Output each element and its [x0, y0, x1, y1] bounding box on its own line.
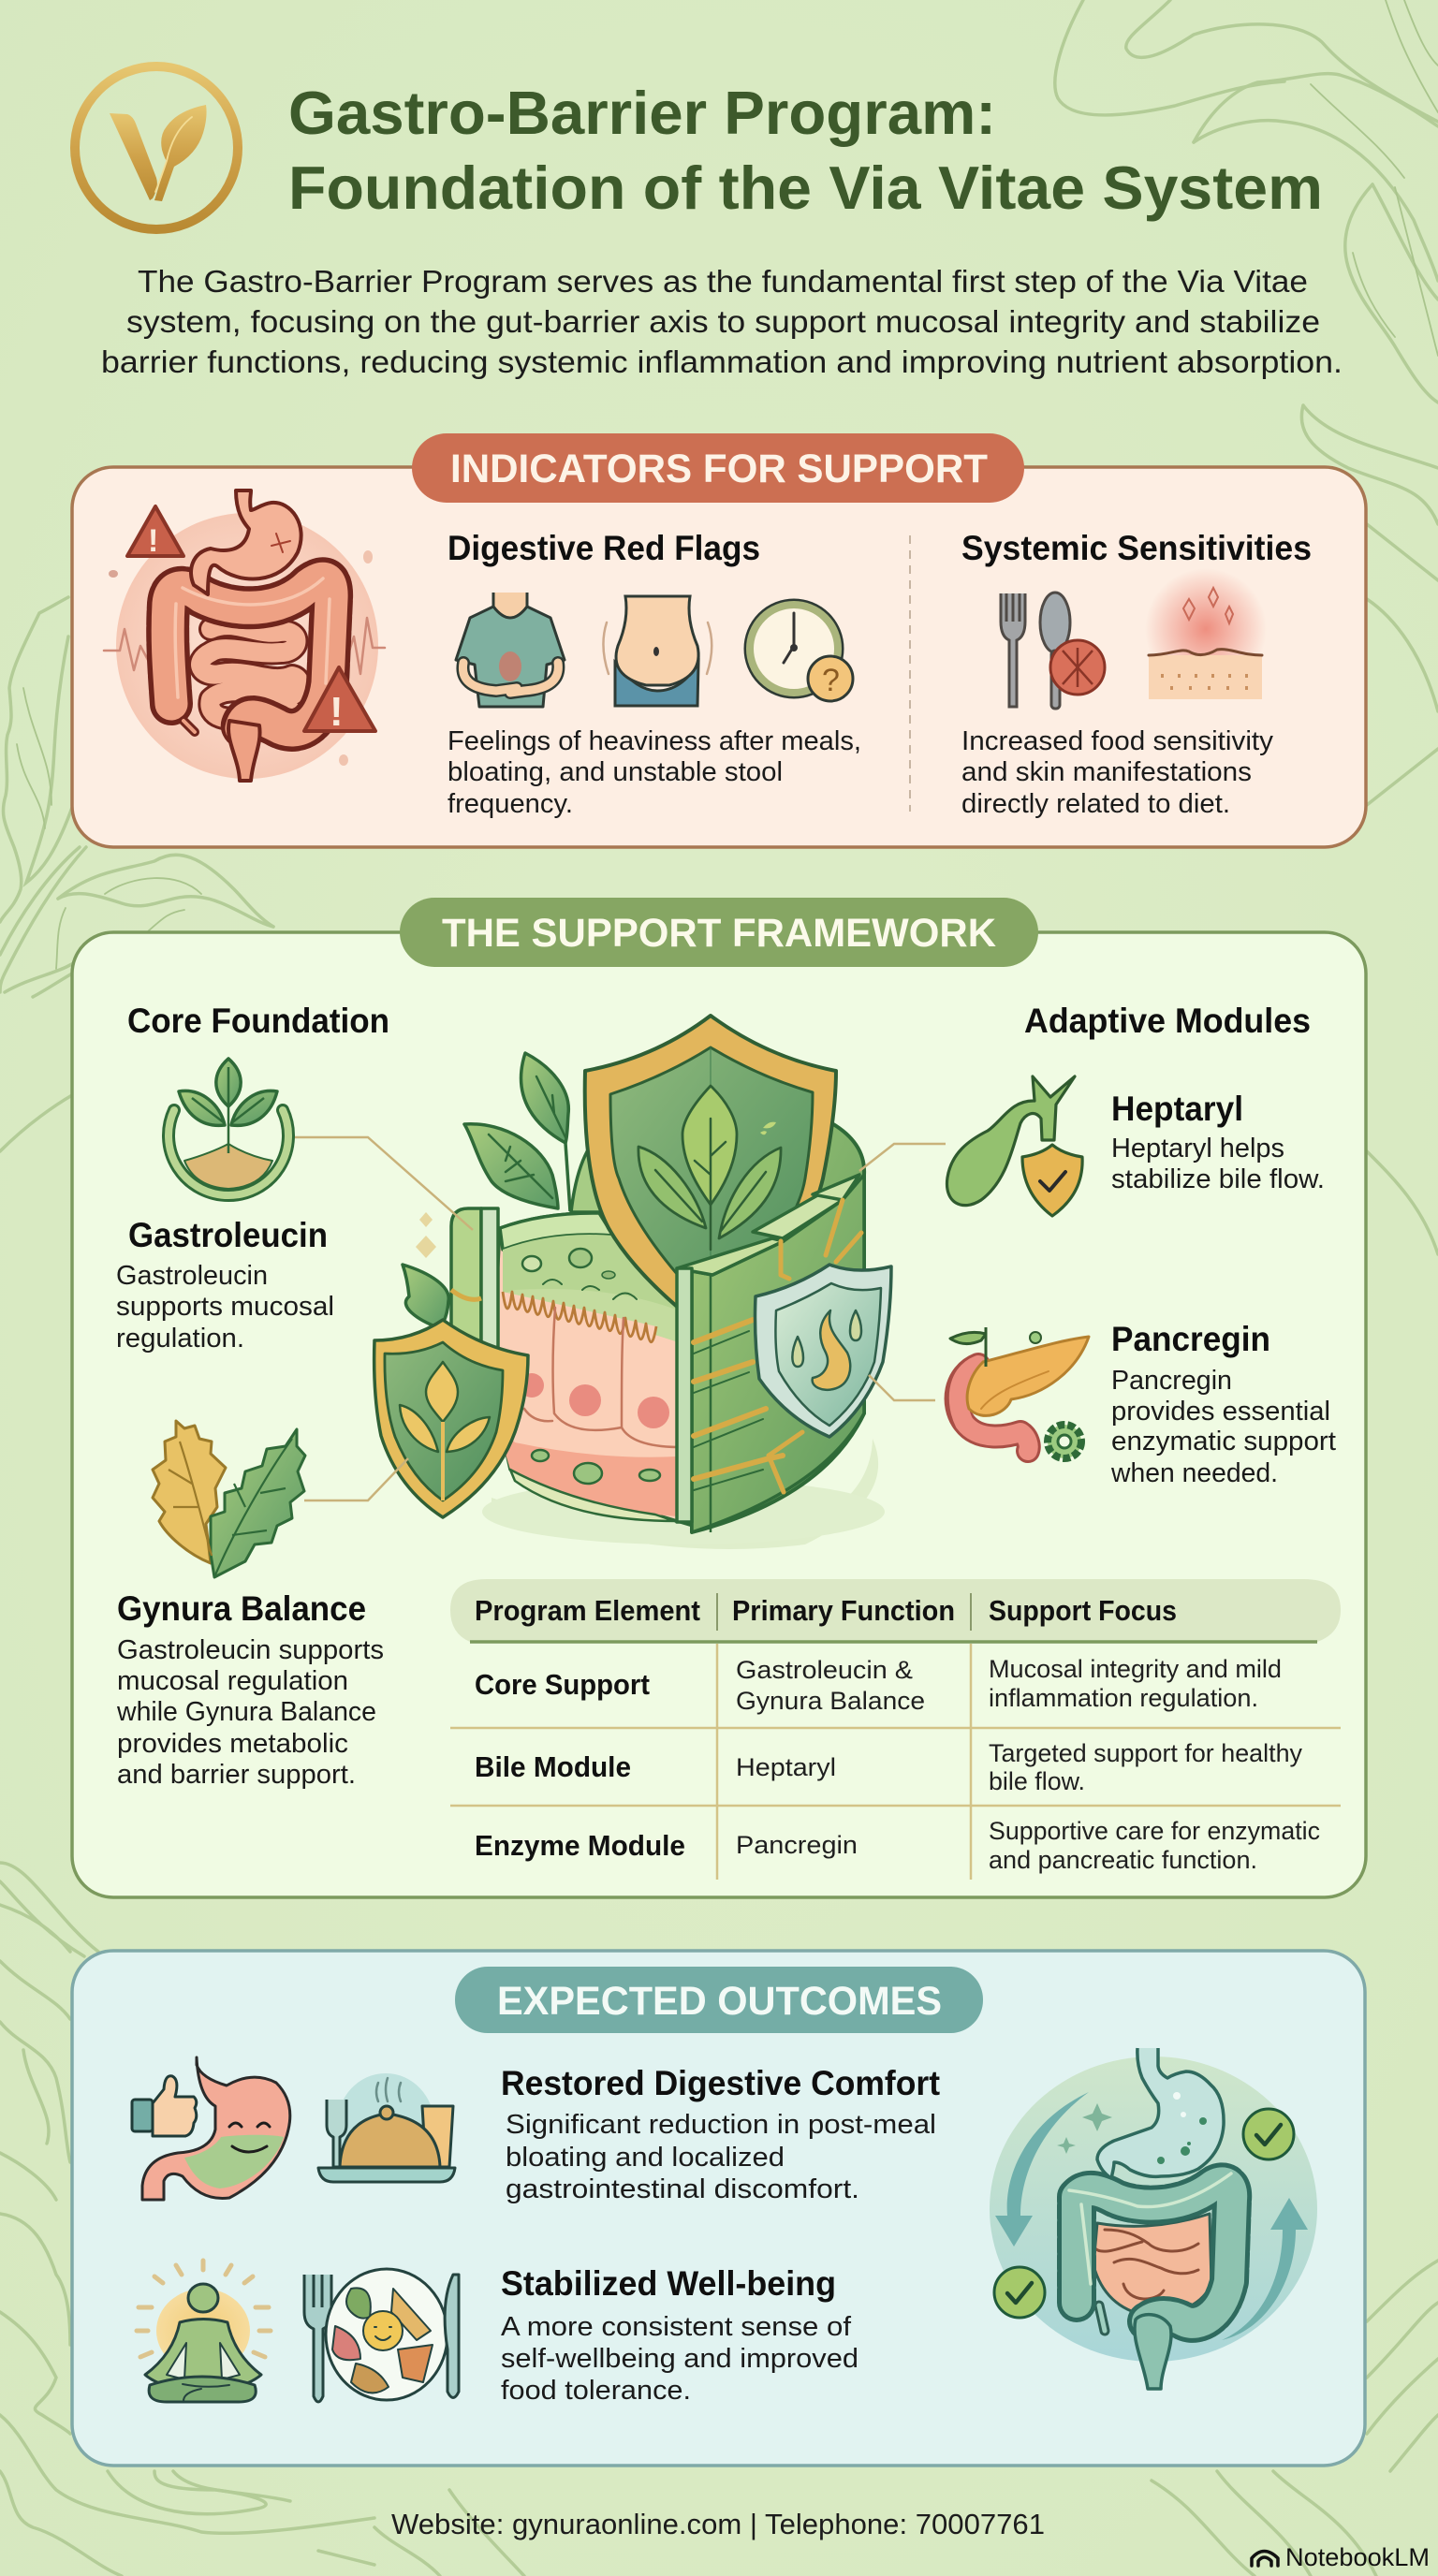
- heading: core foundation: Core Foundation: [127, 1002, 389, 1040]
- text: heptaryl: stabilize bile flow.: [1111, 1164, 1325, 1194]
- text: gastroleucin: [116, 1261, 334, 1354]
- text: systemic sensitivities: directly related to diet.: [961, 789, 1230, 819]
- heading pill: expected outcomes: [455, 1967, 983, 2033]
- icon: inflamed digestive tract: [104, 490, 385, 781]
- text: heptaryl: Heptaryl helps: [1111, 1134, 1284, 1164]
- text: systemic sensitivities: and skin manifestations: [961, 757, 1252, 787]
- heading: restored digestive comfort: Restored Digestive Comfort: [501, 2064, 940, 2102]
- left pillar: [451, 1208, 498, 1385]
- row: core support: Mucosal integrity and mild: [989, 1655, 1282, 1683]
- row: core support: Gastroleucin &: [736, 1656, 913, 1684]
- text: gynura balance: mucosal regulation: [117, 1666, 348, 1696]
- text: gynura balance: Gastroleucin supports: [117, 1635, 384, 1665]
- panel: the support framework: [72, 898, 1366, 1897]
- text: pancregin: Pancregin: [1111, 1366, 1232, 1396]
- heading: gynura balance: Gynura Balance: [117, 1589, 366, 1628]
- row: enzyme module: and pancreatic function.: [989, 1846, 1257, 1874]
- icon: person holding stomach: [456, 593, 565, 707]
- text: stabilized well-being: A more consistent sense of: [501, 2312, 852, 2342]
- intro text: [101, 264, 1343, 379]
- icon: bloated belly: [603, 596, 712, 706]
- icon: thumbs up: [132, 2076, 197, 2136]
- heading: pancregin: Pancregin: [1111, 1320, 1270, 1358]
- text: stabilized well-being: food tolerance.: [501, 2376, 691, 2406]
- icon: pancreas with gear: [950, 1327, 1089, 1458]
- panel: indicators for support: [72, 433, 1366, 847]
- text: pancregin: [1110, 1366, 1336, 1488]
- heading pill: indicators: [412, 433, 1024, 503]
- tissue cross section: [492, 1213, 693, 1526]
- row: enzyme module: Supportive care for enzymatic: [989, 1817, 1320, 1845]
- sparkles: [416, 1212, 436, 1258]
- watermark: notebooklm: NotebookLM: [1285, 2543, 1430, 2571]
- back wall: [692, 1121, 864, 1532]
- icon: irritated skin: [1145, 568, 1267, 699]
- icon: fork and spoon with cross: [1001, 593, 1105, 709]
- back leaves: [464, 1053, 604, 1212]
- icon: gallbladder with shield: [946, 1076, 1082, 1216]
- text: digestive red flags: [448, 726, 861, 819]
- small leaf: [403, 1265, 448, 1328]
- text: systemic sensitivities: [961, 726, 1273, 819]
- icon: sprout in soil: [169, 1059, 288, 1195]
- table header: [450, 1579, 1341, 1642]
- row: enzyme module: [475, 1817, 1320, 1874]
- icon: covered dish: [318, 2073, 455, 2182]
- row: core support: Gynura Balance: [736, 1687, 925, 1715]
- text: digestive red flags: bloating, and unstable stool: [448, 757, 783, 787]
- text: gastroleucin: Gastroleucin: [116, 1261, 268, 1291]
- table: program elements: [450, 1579, 1341, 1880]
- intro text: The Gastro-Barrier Program serves as the fundamental first step of the Via Vitae: [138, 264, 1308, 299]
- logo: gold V leaf: [75, 66, 238, 229]
- row: bile module: Heptaryl: [736, 1753, 836, 1781]
- gold left shield: [374, 1320, 528, 1517]
- icon: healthy gut illustration: [990, 2048, 1317, 2389]
- illustration: gut barrier with shields: [374, 1016, 891, 1549]
- text: pancregin: when needed.: [1110, 1458, 1278, 1488]
- icon: clock with question mark: ?: [822, 663, 840, 698]
- intro text: system, focusing on the gut-barrier axis to support mucosal integrity and stabilize: [126, 304, 1320, 339]
- divider: [909, 535, 911, 812]
- row: core support: Core Support: [475, 1668, 650, 1701]
- text: pancregin: enzymatic support: [1111, 1427, 1336, 1456]
- text: digestive red flags: frequency.: [448, 789, 573, 819]
- table header: Program Element: [475, 1594, 700, 1627]
- text: stabilized well-being: [501, 2312, 858, 2406]
- row: core support: [475, 1655, 1282, 1715]
- row: bile module: Bile Module: [475, 1750, 631, 1783]
- text: gynura balance: provides metabolic: [117, 1729, 348, 1759]
- footer contact line: Website: gynuraonline.com | Telephone: 70007761: [391, 2508, 1045, 2540]
- icon: clock with question mark: [745, 600, 853, 701]
- text: gastroleucin: supports mucosal: [116, 1292, 334, 1322]
- icon: meditating person: [137, 2261, 271, 2402]
- heading pill: support framework: [400, 898, 1038, 967]
- row: bile module: [475, 1739, 1302, 1795]
- heading: adaptive modules: Adaptive Modules: [1024, 1002, 1311, 1040]
- text: systemic sensitivities: Increased food sensitivity: [961, 726, 1273, 756]
- text: pancregin: provides essential: [1111, 1397, 1330, 1427]
- row: core support: inflammation regulation.: [989, 1684, 1258, 1712]
- heading pill: indicators: INDICATORS FOR SUPPORT: [450, 446, 988, 491]
- table header: Primary Function: [732, 1594, 955, 1627]
- icon: plate with food: [304, 2269, 459, 2402]
- row: bile module: bile flow.: [989, 1767, 1085, 1795]
- teal right shield: [755, 1265, 891, 1437]
- row: enzyme module: Pancregin: [736, 1831, 858, 1859]
- row: bile module: Targeted support for healthy: [989, 1739, 1302, 1767]
- text: restored comfort: Significant reduction in post-meal: [506, 2110, 936, 2140]
- text: restored comfort: gastrointestinal discomfort.: [506, 2174, 859, 2204]
- text: gynura balance: [116, 1635, 384, 1790]
- text: gynura balance: while Gynura Balance: [116, 1697, 376, 1727]
- heading: stabilized well-being: Stabilized Well-being: [501, 2264, 836, 2303]
- heading: gastroleucin: Gastroleucin: [128, 1216, 328, 1254]
- text: gynura balance: and barrier support.: [117, 1760, 356, 1790]
- text: gastroleucin: regulation.: [116, 1324, 244, 1354]
- table header: Support Focus: [989, 1594, 1177, 1627]
- heading pill: expected outcomes: EXPECTED OUTCOMES: [497, 1979, 942, 2024]
- text: restored comfort: bloating and localized: [506, 2143, 785, 2173]
- title: Gastro-Barrier Program:: [288, 79, 996, 147]
- heading: systemic sensitivities: Systemic Sensitivities: [961, 529, 1312, 567]
- icon: gynura leaves: [153, 1421, 305, 1577]
- intro text: barrier functions, reducing systemic inflammation and improving nutrient absorption.: [101, 344, 1343, 379]
- icon: inflamed digestive tract: !: [330, 689, 344, 735]
- text: restored comfort: [506, 2110, 936, 2204]
- text: digestive red flags: Feelings of heaviness after meals,: [448, 726, 861, 756]
- large shield: [585, 1016, 836, 1334]
- connector lines: [294, 1137, 946, 1500]
- title: [288, 79, 1323, 222]
- row: enzyme module: Enzyme Module: [475, 1829, 685, 1862]
- heading: digestive red flags: Digestive Red Flags: [448, 529, 760, 567]
- icon: inflamed digestive tract: !: [148, 523, 158, 559]
- panel: expected outcomes: [72, 1951, 1365, 2466]
- text: stabilized well-being: self-wellbeing and improved: [501, 2344, 858, 2374]
- title: Foundation of the Via Vitae System: [288, 154, 1323, 222]
- heading pill: support framework: THE SUPPORT FRAMEWORK: [442, 911, 996, 956]
- text: heptaryl: [1111, 1134, 1325, 1194]
- brick barrier wall: [677, 1175, 864, 1532]
- heading: heptaryl: Heptaryl: [1111, 1090, 1243, 1128]
- icon: happy stomach: [142, 2057, 290, 2200]
